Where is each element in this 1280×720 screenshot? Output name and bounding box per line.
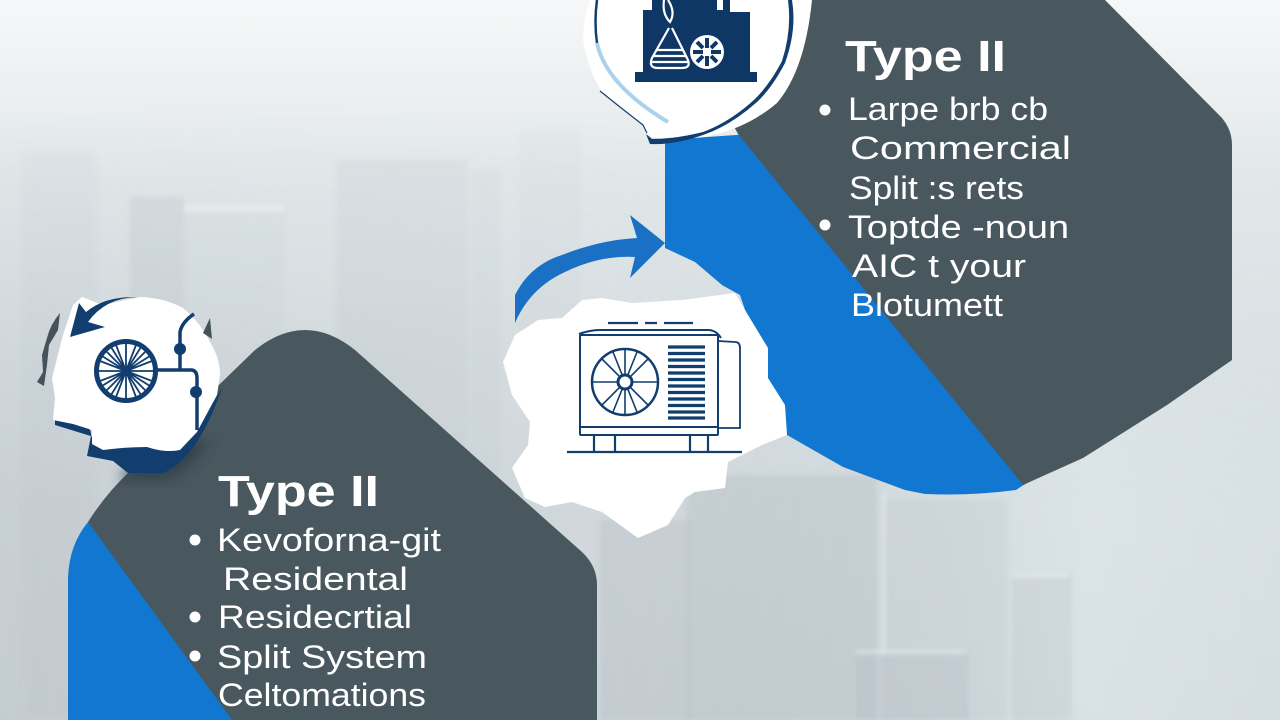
- white blob: [52, 297, 220, 451]
- icon: wheel with pipes and arrow: [37, 297, 222, 473]
- fan wheel: [96, 342, 156, 400]
- grey body upper card: [720, 0, 1232, 485]
- AC vent grille: [668, 347, 705, 418]
- icon: factory badge: [583, 0, 812, 144]
- panel: upper-right Type II card: [665, 0, 1232, 494]
- badge outline: [596, 0, 597, 43]
- thin left outline: [600, 91, 647, 133]
- list lower card: [190, 522, 441, 713]
- list lower card: Residecrtial: [218, 599, 412, 635]
- flask fan: [690, 35, 724, 69]
- badge dark sweep: [646, 0, 793, 144]
- shadow under wheel icon: [118, 440, 210, 480]
- arrow: curved blue: [515, 215, 665, 323]
- torn white blob: [503, 293, 787, 538]
- blue accent upper card: [665, 134, 1035, 494]
- light blue badge stroke: [597, 43, 668, 122]
- list upper card: Larpe brb cb: [848, 91, 1048, 127]
- list upper card: AIC t your: [852, 248, 1026, 284]
- list lower card: Celtomations: [218, 677, 426, 713]
- heading lower card: Type II: [218, 467, 379, 516]
- white badge blob: [583, 0, 812, 139]
- list upper card: Commercial: [850, 130, 1071, 166]
- list upper card: Blotumett: [851, 287, 1003, 323]
- blue accent lower card: [68, 522, 250, 720]
- pipes: [157, 314, 197, 430]
- list lower card: Residental: [223, 561, 408, 597]
- list upper card: Toptde -noun: [848, 209, 1069, 245]
- list lower card: Kevoforna-git: [217, 522, 441, 558]
- factory silhouette: [635, 0, 757, 82]
- heading upper card: Type II: [845, 32, 1006, 81]
- arrow on wheel icon: [70, 297, 137, 337]
- list lower card: Split System: [217, 639, 427, 675]
- grey body lower card: [88, 330, 597, 720]
- list upper card: [820, 91, 1071, 323]
- flask: [651, 0, 689, 68]
- panel: lower-left Type II card: [68, 330, 597, 720]
- list upper card: Split :s rets: [849, 170, 1024, 206]
- dark base sweep: [55, 388, 222, 473]
- AC body: [567, 323, 742, 452]
- icon: outdoor AC unit: [503, 293, 787, 538]
- dark flecks: [37, 313, 212, 386]
